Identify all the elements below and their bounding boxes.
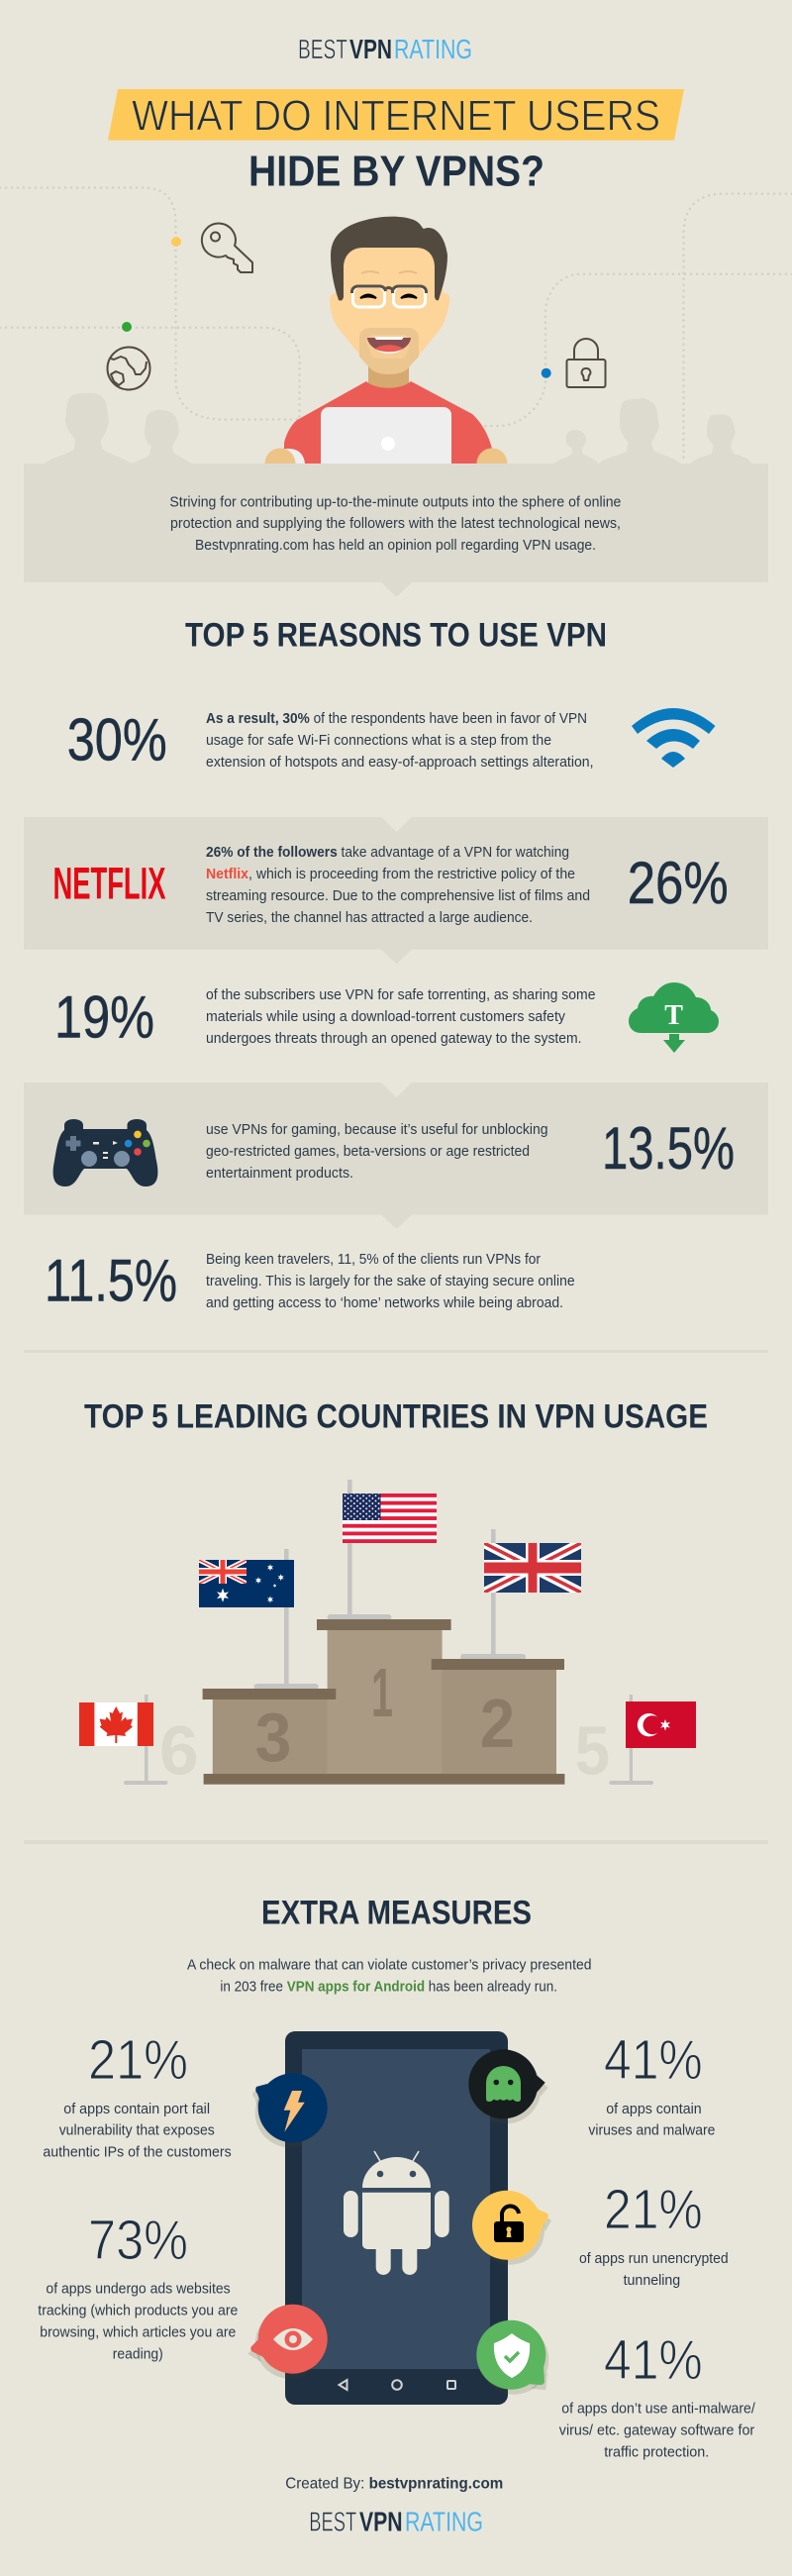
stat: 21% unencrypted — [579, 2178, 729, 2289]
reason 3: text: materials while using a download-torrent customers safety — [206, 1009, 566, 1025]
reason 5: stat: 11.5% — [45, 1248, 177, 1313]
panel: reason 4 — [24, 1082, 768, 1229]
panel: reason 2 — [24, 817, 768, 965]
silhouettes: left audience — [45, 393, 192, 464]
stat: 41% viruses: of apps contain — [606, 2101, 702, 2117]
flag: Australia — [199, 1560, 294, 1607]
logo: bottom: BEST — [309, 2507, 356, 2537]
stat: 73% ads tracking — [38, 2209, 238, 2362]
person illustration — [265, 217, 507, 479]
bubble: lightning — [252, 2073, 328, 2147]
heading: top 5 reasons: TOP 5 REASONS TO USE VPN — [185, 616, 607, 654]
bubble: shield — [476, 2320, 548, 2395]
flag pole bases and poles — [124, 1480, 653, 1785]
dot: blue — [542, 368, 551, 378]
icon: gamepad — [53, 1119, 157, 1186]
reason 2: stat: 26% — [628, 850, 729, 916]
logo: top: RATING — [394, 34, 472, 64]
reason 3: text — [206, 987, 596, 1047]
stat: 41% viruses: viruses and malware — [588, 2122, 715, 2139]
reason 5: text — [206, 1252, 575, 1311]
rank number 6: 6 — [159, 1712, 198, 1790]
stat: 73% ads tracking: of apps undergo ads websites — [46, 2281, 231, 2298]
reason 1: text: As a result, 30% of the respondents have been in favor of VPN — [206, 711, 587, 727]
reason 2: text: streaming resource. Due to the comprehensive list of films and — [206, 888, 590, 904]
reason 4: text: entertainment products. — [206, 1166, 353, 1182]
reason 5: text: traveling. This is largely for the sake of staying secure online — [206, 1274, 575, 1289]
reason 4: text — [206, 1122, 548, 1182]
stat: 73% ads tracking: tracking (which products you are — [38, 2303, 238, 2319]
stat: 21% port fail: vulnerability that exposes — [59, 2122, 215, 2139]
extra measures intro text: A check on malware that can violate customer’s privacy presented — [187, 1957, 592, 1973]
reason 3: stat: 19% — [54, 984, 154, 1050]
stat: 73% ads tracking: 73% — [88, 2209, 188, 2272]
bubble: open padlock — [472, 2191, 551, 2265]
icon: wifi — [632, 708, 715, 768]
icon: padlock — [566, 339, 606, 387]
icon: torrent cloud — [629, 982, 719, 1053]
reason 4: text: use VPNs for gaming, because it’s useful for unblocking — [206, 1122, 548, 1138]
icon: globe — [107, 347, 150, 390]
stat: 41% no anti-malware: of apps don’t use anti-malware/ — [561, 2400, 756, 2417]
stat: 41% no anti-malware: traffic protection. — [604, 2444, 709, 2461]
panel: intro — [24, 464, 768, 597]
extra measures intro text: in 203 free VPN apps for Android has been already run. — [220, 1978, 557, 1995]
reason 3: text: undergoes threats through an opened gateway to the system. — [206, 1031, 582, 1047]
flag: Canada — [79, 1702, 153, 1746]
stat: 21% unencrypted: 21% — [604, 2178, 703, 2241]
reason 2: text — [206, 845, 590, 926]
logo: top: VPN — [349, 34, 392, 64]
reason 2: text: TV series, the channel has attracted a large audience. — [206, 910, 533, 926]
stat: 73% ads tracking: browsing, which articles you are — [40, 2323, 236, 2341]
heading: leading countries: TOP 5 LEADING COUNTRIES IN VPN USAGE — [84, 1398, 708, 1436]
extra measures intro text — [187, 1957, 592, 1995]
rank number 5: 5 — [575, 1712, 610, 1790]
title second line: HIDE BY VPNS? — [248, 147, 544, 196]
credit line: Created By: bestvpnrating.com — [285, 2475, 503, 2492]
panel: intro: Bestvpnrating.com has held an opinion poll regarding VPN usage. — [195, 537, 596, 554]
reason 4: text: geo-restricted games, beta-versions or age restricted — [206, 1144, 530, 1160]
podium: 2 — [480, 1685, 515, 1762]
reason 5: text: and getting access to ‘home’ networks while being abroad. — [206, 1295, 563, 1311]
flag: USA — [343, 1494, 437, 1543]
stat: 21% port fail — [43, 2028, 232, 2161]
reason 3: text: of the subscribers use VPN for safe torrenting, as sharing some — [206, 987, 596, 1003]
logo: bottom — [309, 2507, 483, 2537]
stat: 41% viruses — [588, 2028, 715, 2139]
logo: top — [298, 34, 472, 64]
reason 1: text: extension of hotspots and easy-of-approach settings alteration, — [206, 755, 594, 771]
title banner: WHAT DO INTERNET USERS — [132, 91, 660, 141]
phone nav buttons — [339, 2380, 455, 2390]
flag: UK — [484, 1543, 581, 1593]
icon: key — [202, 224, 252, 272]
dot: green — [122, 322, 132, 332]
podium — [203, 1619, 564, 1785]
heading: extra measures: EXTRA MEASURES — [261, 1894, 532, 1931]
stat: 21% port fail: 21% — [88, 2028, 188, 2092]
podium: 1 — [371, 1654, 393, 1731]
stat: 41% no anti-malware — [559, 2328, 756, 2461]
stat: 21% port fail: of apps contain port fail — [63, 2101, 210, 2117]
logo: bottom: VPN — [359, 2507, 403, 2537]
panel: intro: protection and supplying the followers with the latest technological news, — [170, 515, 621, 532]
logo: top: BEST — [298, 34, 347, 64]
stat: 41% no anti-malware: virus/ etc. gateway software for — [559, 2421, 754, 2438]
reason 2: text: 26% of the followers take advantage of a VPN for watching — [206, 845, 569, 861]
podium: 3 — [255, 1699, 291, 1776]
panel: intro: Striving for contributing up-to-the-minute outputs into the sphere of online — [169, 493, 621, 511]
logo: netflix: NETFLIX — [53, 858, 166, 909]
stat: 41% no anti-malware: 41% — [604, 2328, 703, 2392]
reason 2: text: Netflix, which is proceeding from the restrictive policy of the — [206, 867, 575, 882]
android robot — [344, 2151, 449, 2275]
reason 5: text: Being keen travelers, 11, 5% of the clients run VPNs for — [206, 1252, 541, 1268]
reason 1: stat: 30% — [67, 707, 167, 773]
icon: torrent cloud: T — [664, 1000, 683, 1031]
reason 1: text — [206, 711, 594, 771]
logo: bottom: RATING — [405, 2507, 483, 2537]
stat: 73% ads tracking: reading) — [113, 2345, 163, 2362]
phone — [285, 2031, 508, 2405]
stat: 21% port fail: authentic IPs of the customers — [43, 2144, 232, 2161]
silhouettes: right audience — [554, 398, 751, 464]
stat: 21% unencrypted: of apps run unencrypted — [579, 2250, 729, 2267]
bubble: ghost — [468, 2049, 548, 2123]
dot: yellow — [171, 237, 181, 247]
dotted network lines — [0, 188, 792, 462]
flag: Turkey — [626, 1701, 696, 1748]
reason 1: text: usage for safe Wi-Fi connections what is a step from the — [206, 733, 551, 749]
bubble: eye — [248, 2305, 328, 2379]
stat: 21% unencrypted: tunneling — [624, 2272, 680, 2289]
reason 4: stat: 13.5% — [602, 1115, 735, 1182]
stat: 41% viruses: 41% — [604, 2028, 703, 2092]
